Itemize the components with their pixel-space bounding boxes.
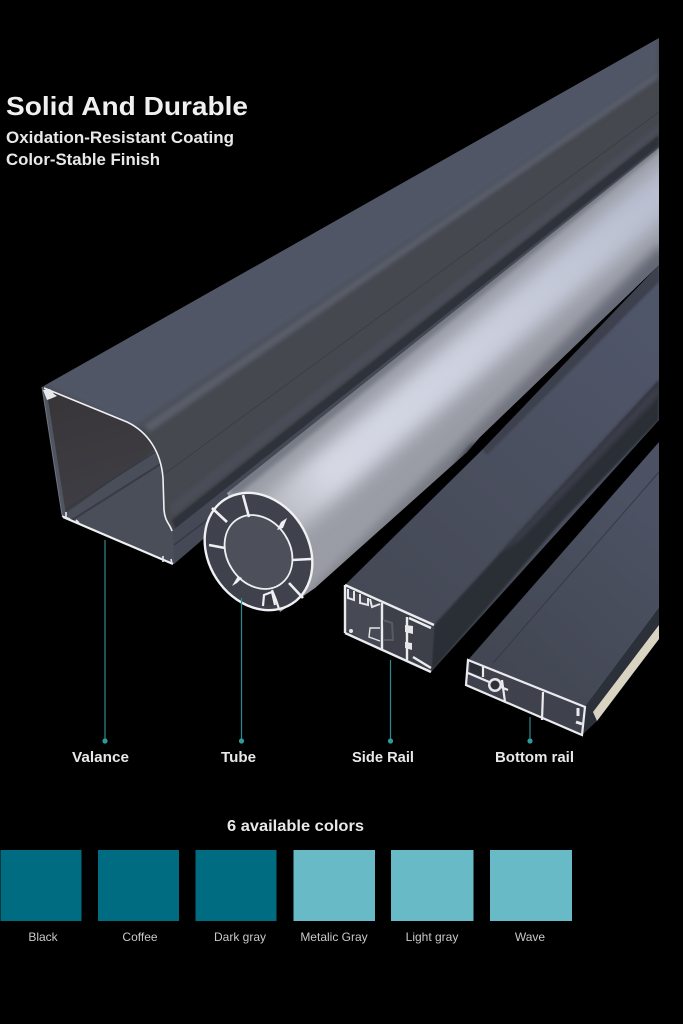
bottom rail profile	[466, 442, 659, 735]
callout: side rail: Side Rail	[352, 750, 414, 766]
callout: tube	[221, 598, 256, 766]
swatch: Coffee: Coffee	[122, 930, 158, 944]
swatch: Light gray: Light gray	[406, 930, 458, 944]
subtitle text block	[6, 129, 234, 169]
title: Solid And Durable	[6, 91, 248, 121]
callout: valance	[72, 540, 129, 766]
valance white outline	[44, 388, 172, 531]
swatch: Dark gray	[196, 850, 276, 944]
callout: bottom rail: Bottom rail	[495, 750, 574, 766]
swatch: Wave: Wave	[515, 930, 545, 944]
swatch: Black: Black	[28, 930, 59, 944]
colors heading: 6 available colors	[227, 818, 364, 835]
subtitle text block: Oxidation-Resistant Coating	[6, 129, 234, 147]
swatch: Coffee	[98, 850, 179, 944]
bottom rail end section	[466, 660, 585, 735]
swatch: Light gray	[391, 850, 474, 944]
callout: tube: Tube	[221, 750, 256, 766]
right edge mask	[659, 0, 683, 760]
subtitle text block: Color-Stable Finish	[6, 151, 160, 169]
callout: side rail	[352, 660, 414, 766]
swatch: Dark gray: Dark gray	[214, 930, 266, 944]
valance profile	[42, 38, 659, 565]
tube end section	[183, 472, 334, 631]
valance interior	[42, 387, 174, 564]
side rail end section	[345, 585, 434, 672]
callout: valance: Valance	[72, 750, 129, 766]
swatch: Black	[0, 850, 82, 944]
swatch: Metalic Gray	[294, 850, 375, 944]
callout: bottom rail	[495, 717, 574, 766]
swatch: Metalic Gray: Metalic Gray	[300, 930, 368, 944]
swatch: Wave	[490, 850, 572, 944]
weather strip	[593, 625, 659, 721]
tube profile	[203, 148, 659, 612]
side rail profile	[340, 260, 660, 680]
